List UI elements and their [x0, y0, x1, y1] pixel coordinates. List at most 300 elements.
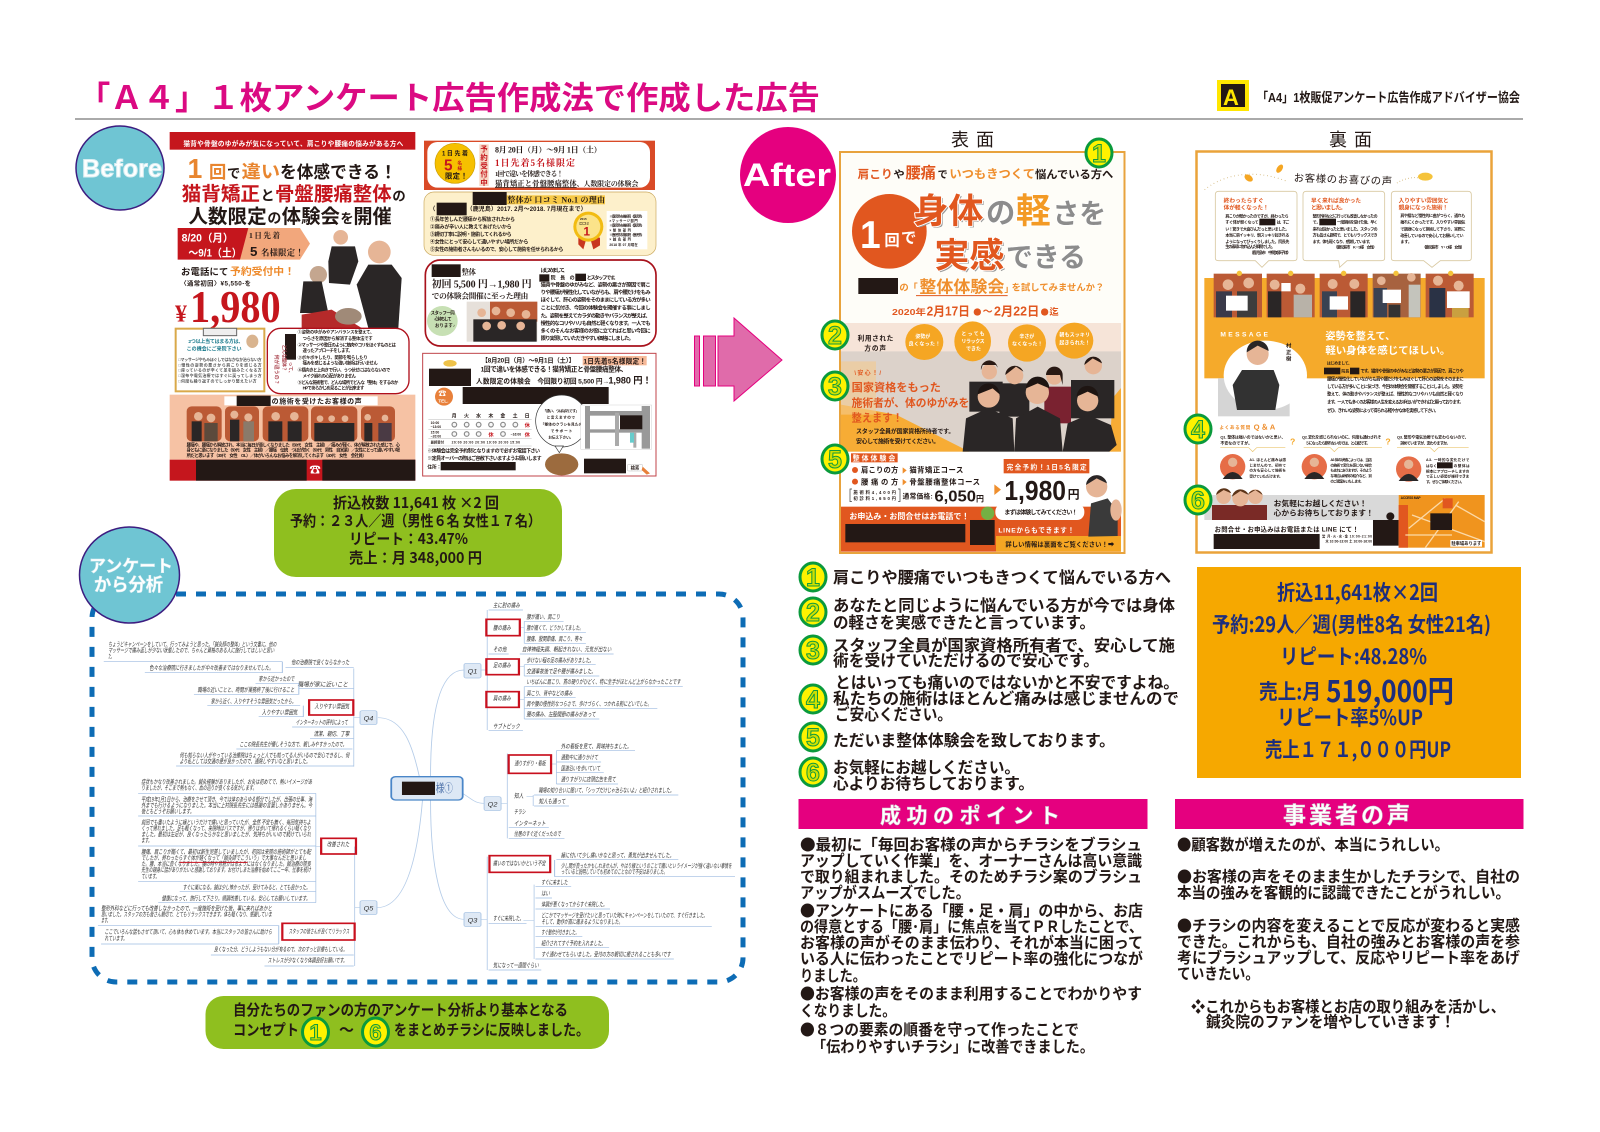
offer area: 整体体験会: [853, 453, 895, 462]
before flyer: front: で: [227, 166, 240, 181]
numbered concept list: お気軽にお越しください。: [833, 758, 1020, 777]
Q2 branch: 外の看板を見て、興味持ちました。: [561, 742, 631, 750]
why panel: 心待ちして: [434, 315, 452, 322]
concept box: をまとめチラシに反映しました。: [394, 1022, 589, 1039]
numbered concept list: 私たちの施術はほとんど痛みは感じませんので: [833, 689, 1179, 708]
Q5 branch: 後ともどうぞお願いします。: [141, 807, 194, 815]
association logo: [1217, 80, 1520, 111]
Q2 branch: Q2: [488, 801, 498, 808]
Q4 branch: 職場の近いことと、時間が業務終了後に行けること: [198, 686, 295, 694]
Q1 branch: サブトピック: [493, 722, 520, 730]
Q5 branch: ここでいろんな話もさせて頂いて、心も体も休めています。本当にスタッフの皆さんに助けら: [105, 928, 272, 936]
contact details: お問合せ・お申込みはお電話または LINE にて！: [1215, 525, 1359, 534]
before flyer: front: を体感できる！: [280, 162, 397, 182]
customer voice bubbles: 起きられた！: [1059, 340, 1090, 347]
reasons box: ③ボキボキしたり、関節を鳴らしたり: [298, 354, 368, 361]
Q2 branch: 通りすがり・看板: [514, 759, 547, 767]
Q1 branch: 歩けない程の足の痛みがありました。: [527, 657, 593, 664]
badge: survey analysis: アンケート: [89, 557, 173, 576]
Q and A: もまれにありますが、そのよう: [1330, 468, 1372, 473]
numbered concept list: 肩こりや腰痛でいつもきつくて悩んでいる方へ: [833, 568, 1171, 587]
customer voices: 身ともに楽になりました（50代 女性 主婦）／腰痛 伝統 つぼが効く（50代 男性 自営業）／女性にとって通いやすい場: [187, 447, 401, 454]
reasons box: ⑤どんな施術者で、どんな場所でどんな「整体」をするのか: [298, 379, 399, 386]
concept box: コンセプト: [233, 1022, 299, 1039]
contact bar: [841, 504, 1121, 552]
numbered concept list: とはいっても痛いのではないかと不安ですよね。: [835, 673, 1179, 692]
headline: 腰痛: [905, 165, 936, 182]
call to action banner: お気軽にお越しください！: [1274, 498, 1367, 508]
panel: success points: ●８つの要素の順番を守って作ったことで: [800, 1018, 1079, 1040]
header box with dates: 1日先着5名様限定: [495, 157, 575, 168]
customer photos: [1214, 271, 1474, 317]
schedule table: ~13:00: [431, 425, 441, 429]
Q1 branch: 足の痛み: [493, 662, 511, 669]
reasons box: ①姿勢のゆがみやアンバランスを整えて、: [298, 329, 374, 336]
Q1 branch: 腰の痛み: [493, 624, 511, 632]
Q4 branch: 入りやすい雰囲気: [262, 708, 298, 716]
panel: survey mind map: [92, 594, 743, 982]
schedule table: 休: [525, 421, 531, 429]
access panel: 1,980 円！: [608, 375, 652, 385]
number marker 3: [822, 372, 848, 401]
headline: で: [938, 170, 948, 181]
before results box: 売上：月 348,000 円: [349, 547, 482, 568]
access panel: ☎: [438, 389, 446, 398]
access panel: 1回で違いを体感できる！猫背矯正と骨盤腰痛整体、: [481, 364, 627, 373]
after results box: 売上:月: [1259, 676, 1321, 706]
panel: owner voice: できた。これからも、自社の強みとお客様の声を参: [1177, 930, 1520, 952]
staff team photo: [963, 357, 1117, 452]
schedule table: 20:00 20:00 20:00 19:00 20:00 15:00: [452, 440, 520, 444]
access panel: 人数限定の体験会: [476, 376, 531, 385]
Q3 branch: 痛いのではないかという不安: [493, 859, 547, 867]
Q4 branch: 清潔、親切、丁寧: [314, 730, 350, 738]
numbered concept list: 6: [806, 759, 820, 787]
Q5 branch: 外までも行けるようになりました。本当に上村院長先生には感謝の言葉しかありません。今: [141, 801, 313, 809]
dates: 2月17日: [927, 305, 970, 319]
contact details: 木 10:00-13:00 土 10:00-16:00: [1325, 538, 1372, 543]
access panel: 検索: [631, 464, 640, 471]
why panel: た。姿勢を整えてカラダの動きやバランスが整えば、: [541, 311, 651, 319]
why panel: 初回 5,500 円→1,980 円: [432, 278, 532, 291]
offer area: 完全予約！1日5名限定: [1007, 463, 1087, 472]
main copy: 身体: [913, 193, 984, 231]
Q5 branch: 前回でも書いたように縁というだけで痛いと思っていたが、全然 不安も無く、毎回気持ちよ: [141, 818, 311, 826]
Q1 branch: 肩こり、背中などの痛み: [527, 689, 573, 697]
Q5 branch: スタッフの皆さんが良くてリラックス: [289, 927, 350, 935]
panel: success points: で取り組まれました。そのためチラシ案のブラシュ: [800, 865, 1142, 887]
panel: success points: お客様の声がそのまま伝わり、それが本当に困って: [800, 931, 1143, 953]
panel: success points: アップしていく作業」を、オーナーさんは高い意識: [800, 849, 1142, 871]
before flyer: front: 1: [188, 153, 202, 184]
Q2 branch: 国道沿いを歩いていて: [561, 765, 600, 772]
schedule table: [428, 412, 532, 446]
Q2 branch: [484, 742, 678, 838]
Q and A: [1219, 423, 1470, 484]
offer area: [841, 452, 1121, 507]
reasons panel: word of mouth No.1: 1: [583, 224, 590, 238]
nationally qualified copy: スタッフ全員が国家資格所持者です。: [856, 427, 954, 435]
photo background: [841, 323, 1121, 452]
testimonial bubbles: 体が軽くなった！: [1224, 204, 1269, 212]
numbered concept list: 2: [806, 599, 820, 627]
before flyer: front: 猫背や骨盤のゆがみが気になっていて、肩こりや腰痛の悩みがある方へ: [183, 139, 404, 148]
Q and A: A1. ほとんど痛みは感: [1249, 457, 1286, 462]
before flyer: front: 開催: [353, 206, 392, 228]
customer voice bubbles: 利用された: [858, 334, 894, 343]
Q5 branch: た。腰、本当に良くなりました。腰の時や背筋がはるようにはなくなりました。鍼治療の院長: [141, 860, 311, 868]
contact bar: まずは体験してみてください！: [1004, 508, 1078, 516]
reasons panel: word of mouth No.1: ※鹿児島市施術院（鹿児島）: [609, 213, 644, 218]
schedule table: 休: [525, 430, 531, 438]
nationally qualified copy: 国家資格をもった: [852, 380, 941, 394]
message text: 整えて、体の動きやバランスが整えば、慢性的なコリやハリも自然と軽くなり: [1327, 391, 1464, 398]
main copy: 実感: [934, 237, 1004, 275]
nationally qualified copy: [852, 369, 969, 445]
Q5 branch: 改善された: [327, 841, 350, 848]
header box with dates: 名: [457, 159, 462, 166]
Q3 branch: っていると説明していても初めてのことなので不安はありました。: [561, 868, 667, 876]
testimonial bubbles: と思いました。: [1311, 204, 1346, 212]
number marker 6: [1185, 486, 1211, 515]
headline: いつもきつくて: [949, 167, 1035, 181]
contact details: 営 月･火･水･金 10:00-21:00: [1322, 534, 1372, 539]
Q1 branch: その他: [493, 646, 507, 653]
message text: 院長: [1341, 368, 1349, 374]
Q4 branch: インターネットの評判によって: [296, 719, 348, 726]
before flyer: front: 〈通常初回〉¥5,550-を: [180, 279, 251, 288]
label: front side: 表面: [951, 130, 994, 150]
panel: owner voice: ●チラシの内容を変えることで反応が変わると実感: [1177, 914, 1520, 936]
Q3 branch: 体調が悪くなってからすぐ来院した。: [541, 901, 607, 908]
Q3 branch: そして、動作が直に痛まるようになりました。: [541, 918, 623, 926]
access panel: TEL.: [438, 399, 448, 404]
header box with dates: [424, 141, 655, 190]
Q2 branch: 住居のすぐ近くだったので: [514, 830, 561, 838]
mind map: [98, 601, 735, 970]
Q2 branch: 通りすがりに店頭広告を見て: [561, 776, 616, 783]
Q5 branch: [98, 778, 377, 966]
panel: owner voice: ていきたい。: [1177, 962, 1259, 984]
customer voice bubbles: [858, 321, 1093, 362]
customer voice bubbles: 姿勢が: [915, 333, 930, 340]
numbered concept list: 3: [806, 637, 820, 665]
customer voice bubbles: なくなった！: [1012, 340, 1043, 347]
before flyer: front: 予約受付中！: [230, 265, 295, 278]
after results box: リピート:48.28%: [1280, 641, 1427, 671]
before flyer: front: ～9/1（土）: [188, 246, 242, 259]
central topic: 様①: [436, 782, 453, 795]
Q1 branch: [464, 601, 683, 731]
before flyer: front: ☎: [309, 465, 321, 477]
speech bubble: [536, 395, 588, 475]
Q and A: A2. 体の状態によっては、当店: [1330, 457, 1372, 462]
Q4 branch: た。: [108, 653, 114, 660]
Q and A: のご提案をいたします。: [1330, 478, 1364, 483]
reasons panel: word of mouth No.1: ③親切丁寧に説明・施術してくれるから: [430, 231, 512, 238]
why panel: とスタッフです。: [587, 274, 618, 281]
testimonial bubbles: 早く来れば良かった: [1311, 196, 1361, 204]
Q and A: で正しい姿勢が維持できま: [1426, 474, 1470, 479]
Q4 branch: Q4: [364, 715, 373, 722]
access map: 駐車場あります: [1451, 540, 1482, 547]
concept box: 自分たちのファンの方のアンケート分析より基本となる: [233, 1001, 568, 1019]
why panel: 慢性的なコリやハリも自然と軽くなります。一人でも: [541, 319, 651, 327]
numbered concept list: 1: [806, 564, 820, 592]
director portrait: 樹: [1286, 354, 1292, 362]
testimonial bubbles: で親身になって施術して下さり、実際に: [1400, 225, 1465, 231]
testimonial bubbles: 肩こりが酷かったのですが、終わったら: [1225, 212, 1289, 218]
arrow: [694, 318, 782, 401]
after flyer: front: [840, 152, 1124, 553]
testimonial bubbles: 入りやすい雰囲気と: [1399, 196, 1449, 204]
numbered concept list: [800, 563, 1179, 793]
reasons box: HPであらかじめ見ることが出来ます: [303, 385, 365, 392]
checklist clipboard: □マッサージやもみほぐしではなかなか治らない方: [178, 356, 262, 362]
main copy: 実感: [936, 239, 1006, 277]
why panel: ほぐして、肝心の姿勢をそのままにしている方が多い: [541, 295, 651, 303]
Q3 branch: 紹介されてすぐ予約を入れました。: [541, 939, 606, 947]
reasons box: 違ったアプローチをします。: [303, 347, 353, 354]
offer area: 6,050: [934, 489, 976, 506]
Q2 branch: 知人も通って: [539, 797, 566, 805]
testimonial bubbles: [1215, 191, 1471, 267]
schedule table: 休: [488, 430, 494, 438]
speech bubble: お伝え下さい。: [548, 435, 573, 440]
reasons box: [267, 328, 409, 394]
headline: 肩こり: [858, 168, 893, 181]
Q1 branch: 腰が痛い、肩こり: [527, 613, 560, 621]
before flyer: front: 骨盤腰痛整体: [275, 183, 392, 206]
why panel: [425, 260, 656, 346]
dates: 迄: [1049, 306, 1059, 317]
message text: している方が多いことに気づき、今回の体験会を開催することにしました。姿勢を: [1327, 383, 1464, 390]
reasons panel: word of mouth No.1: ×整体部門: [609, 227, 632, 232]
message text: [1324, 359, 1464, 414]
access panel: 【8月20日（月）～9月1日（土）】: [482, 356, 575, 365]
Q5 branch: Q5: [364, 905, 374, 912]
message copy: MESSAGE: [1220, 331, 1269, 338]
Q and A: Q2. 変化を感じられないのに、何度も通わされそ: [1302, 434, 1381, 440]
before flyer: front: [170, 132, 415, 481]
concept box: ～: [339, 1022, 354, 1039]
speech bubble: 「整体のクラシを見たの: [541, 421, 583, 426]
reasons panel: word of mouth No.1: ⑤女性の施術者さんもいるので、安心して施術を任せられるから: [430, 246, 563, 253]
schedule table: 日: [525, 413, 530, 419]
access panel: ※定員オーバーの際はご容赦下さいますようお願いします: [427, 455, 542, 462]
Q1 branch: 腰の痛み、左股関節の痛みがあって: [527, 711, 596, 718]
Q5 branch: れています。: [105, 934, 127, 942]
customer voices: 腰痛や、腰痛から解放され、本当に毎日が楽しくなりました（50代 女性 主婦）／痛みが軽く、体が解放された感じで、心: [187, 441, 401, 448]
why panel: おります♪: [435, 322, 455, 329]
Q4 branch: 家から近かったので: [259, 675, 295, 683]
headline: [858, 165, 1113, 182]
reasons panel: word of mouth No.1: ×鍼灸部門: [609, 237, 632, 242]
subcopy: を試してみませんか？: [1012, 282, 1104, 292]
text: 少し間が良ったかもしれませんが、やはり縁というのことで痛いというイメージが強く違いない事情を: [561, 862, 732, 870]
message text: 腰痛が慢性化していながらも肩や腰だけをもみほぐして肝心の姿勢をそのままに: [1327, 375, 1464, 382]
header box with dates: 受: [480, 161, 488, 170]
reasons panel: word of mouth No.1: 2015: [580, 217, 587, 221]
offer area: 施術料4,400円: [853, 489, 897, 496]
nationally qualified copy: \安心！/: [854, 369, 881, 377]
Q5 branch: 良くなった分、どうしようもない分が有るので、次のすっと診療もしている。: [214, 946, 347, 953]
Q4 branch: 他の治療院で良くならなかった: [291, 659, 350, 666]
concept box: [206, 996, 609, 1049]
Q and A: A3. 一時的な変化だけで: [1426, 457, 1470, 462]
customer voice bubbles: 朝もスッキリ: [1059, 331, 1090, 338]
Q1 branch: 交通事故後で足や腰が痛みました。: [527, 668, 596, 675]
testimonial bubbles: 来れば良かったと思いました。スタッフの: [1313, 225, 1378, 231]
Q5 branch: りましたが、そこまで熱もなく、血の巡りが良くなる気がします。: [141, 784, 256, 792]
schedule table: 10:00: [431, 421, 439, 425]
main copy: の: [986, 197, 1015, 230]
Q and A: す。ぜひご体験ください。: [1426, 479, 1464, 484]
message text: ます。一人でも多くのお客様の人生を変えるお手伝いができればと願っております。: [1327, 399, 1464, 406]
Q5 branch: ストレスが少なくなり体調良好お願いです。: [268, 957, 347, 964]
message text: です。猫背や骨盤のゆがみなど姿勢の悪さが原因で、肩こりや: [1360, 368, 1464, 375]
Q3 branch: すぐ動作が付きました。: [541, 928, 579, 936]
testimonial bubbles: は、すご: [1277, 219, 1289, 225]
reasons box: どんな整体？: [280, 345, 287, 371]
Q5 branch: でしたが、終わったらすぐ体が軽くなって「鍼灸師でこういう」で大事なんだと思いまし: [141, 854, 307, 862]
testimonial bubbles: 方も皆さん親切で、とてもリラックスでき: [1313, 232, 1378, 238]
number marker 1: [1086, 139, 1112, 168]
Q3 branch: Q3: [468, 916, 478, 924]
before flyer: front: を: [340, 211, 354, 226]
testimonial bubbles: 本当に肩イッキリ、朝スッキリ起きれる: [1225, 232, 1289, 238]
panel: owner voice: ❖これからもお客様とお店の取り組みを活かし、: [1191, 995, 1505, 1017]
offer area: 猫背矯正コース: [909, 466, 963, 475]
contact details: [1214, 512, 1399, 549]
checklist clipboard: □慢性の姿勢の悪さから肩こりを感じる方: [178, 361, 262, 367]
schedule table: 月: [452, 413, 457, 419]
reasons panel: word of mouth No.1: 2018 年 07 月現在: [609, 242, 638, 247]
speech bubble: でサポート: [551, 428, 573, 433]
Q3 branch: すぐ通わせてもらいました。受付の方の親切に癒されることも多いです: [541, 951, 672, 958]
Q3 branch: 縁に付いて少し痛いかなと思って、勇気が出ませんでした。: [561, 851, 674, 859]
number marker 5: [822, 445, 848, 474]
testimonial bubbles: 痛れにくかったです。入りやすい雰囲気: [1400, 219, 1465, 225]
reasons box: メイク崩れの心配がありません: [303, 372, 357, 379]
Q1 branch: 肩や腰の慢性的なつらさで、歩けづらく、つかれる割にどいでした。: [527, 700, 652, 708]
Q4 branch: 何も知らない人がやっている治療院はちょっと人でも知ってる人がいるので安心できるし、何: [180, 751, 350, 759]
Q1 branch: 腰痛、股関節痛、肩こり、等々: [527, 635, 583, 643]
before flyer: front: 回: [209, 162, 226, 182]
contact bar: LINEからもできます！: [998, 527, 1074, 535]
numbered concept list: スタッフ全員が国家資格所有者で、安心して施: [833, 636, 1175, 655]
Q1 branch: Q1: [468, 667, 477, 675]
customer voices: の施術を受けたお客様の声: [272, 396, 362, 405]
Q5 branch: すぐに楽になる。鍼は少し怖かったが、受けてみると、とても良かった。: [183, 883, 310, 891]
testimonial bubbles: 整形外科などに行っても改善しなかったの: [1313, 212, 1378, 218]
Q5 branch: 症状もかなり改善されました。鍼灸経験がありましたが、お灸は初めてで、熱いイメージがあ: [141, 778, 313, 786]
subcopy: 整体体験会: [919, 277, 1005, 296]
schedule table: 金: [500, 412, 505, 419]
testimonial bubbles: 肩や腰など慢性的に曲がつらく、通れも: [1400, 212, 1465, 218]
Q2 branch: インターネット: [514, 819, 546, 827]
contact bar: お申込み・お問合せはお電話で！: [849, 511, 969, 521]
before flyer: front: 違い: [242, 162, 280, 182]
testimonial bubbles: ようになってびっくりしました。院長先: [1225, 238, 1289, 244]
before flyer: front: 1日先着: [249, 230, 280, 240]
header box with dates: 8月 20日（月）～9月 1日（土）: [495, 145, 602, 155]
reasons box: つらさを原因から解消する整体法です: [303, 335, 373, 342]
Q4 branch: より私としては交通の便が良かったので、通院しやすいなと思いました。: [180, 757, 310, 765]
director portrait: 村: [1286, 342, 1292, 350]
Q4 branch: ちょうどキャンペーンをしていて、行ってみようと思った。「鍼灸師の整体」という文書に、他の: [108, 641, 277, 648]
customer voice bubbles: できた: [966, 345, 981, 352]
reasons box: 何が違うの？: [273, 355, 280, 385]
number marker 5: 5: [828, 446, 842, 474]
reasons panel: word of mouth No.1: ①長年苦しんだ腰痛から解放されたから: [430, 216, 515, 223]
association logo: 「A4」1枚販促アンケート広告作成アドバイザー協会: [1257, 90, 1520, 105]
Q4 branch: ここの院長先生が優しそうな方で、親しみやすかったので。: [239, 741, 347, 748]
main copy: 軽: [1016, 193, 1051, 231]
offer area: 骨盤腰痛整体コース: [909, 477, 980, 486]
central topic: [391, 777, 463, 800]
Q3 branch: どこかでマッサージを受けたいと思っていた時にキャンペーンをしていたので、すぐ行きました。: [541, 911, 707, 919]
headline: や: [893, 169, 905, 181]
offer area: 1,980: [1004, 475, 1066, 506]
before flyer: front: お電話にて: [181, 266, 228, 277]
Q and A: よくある質問: [1219, 424, 1251, 431]
dates: [892, 305, 1059, 319]
number marker 2: 2: [828, 322, 842, 350]
why panel: ことに気付き、今回の体験会を開催する事にしまし: [541, 303, 651, 311]
Q and A: じませんので、初めて: [1249, 462, 1286, 467]
Q1 branch: 自律神経失調、朝起きれない、元気が出ない: [522, 646, 612, 653]
after results box: 519,000円: [1326, 667, 1454, 711]
man with thumbs up: [1086, 475, 1122, 537]
Q and A: Q＆A: [1254, 423, 1276, 432]
checklist clipboard: □座っているのが辛くて足を組みたくなる方: [178, 367, 262, 373]
header box with dates: 様: [457, 165, 462, 171]
after flyer: back: [1196, 152, 1492, 552]
before flyer: front: と: [261, 188, 275, 204]
heading: customer voices: [1205, 163, 1433, 190]
concept box: 6: [369, 1020, 382, 1045]
Q2 branch: 知人: [514, 792, 524, 800]
number marker 6: 6: [1191, 487, 1205, 515]
why panel: 院長の: [551, 274, 575, 281]
photo: staff treating patient: [300, 230, 402, 328]
offer area: 肩こりの方: [861, 466, 898, 475]
customer voice bubbles: 辛さが: [1019, 333, 1034, 340]
Q and A: 根本にアプローチしますの: [1426, 468, 1470, 473]
nationally qualified copy: 施術者が、体のゆがみを: [852, 396, 969, 410]
reasons panel: word of mouth No.1: ×マッサージ部門: [609, 218, 638, 223]
one-time circle: 1: [860, 213, 881, 257]
speech bubble: と言えますので: [547, 415, 575, 420]
before flyer: back: [423, 141, 656, 476]
why panel: 整体: [462, 267, 477, 276]
number marker 2: [822, 321, 848, 350]
Q and A: 不安なのですが。: [1220, 439, 1252, 445]
before flyer: front: ¥: [175, 301, 187, 327]
mind map: いちばんに肩こり、首の硬りがひどく、特に生手がほとんど上がらなかったことです: [527, 678, 681, 686]
panel: success points: りました。: [800, 964, 866, 986]
panel: success points: いる人に伝わったことでリピート率の強化につなが: [800, 947, 1143, 969]
why panel: での体験会開催に至った理由: [432, 291, 529, 301]
Q5 branch: 健康になって、旅行して下さり。順調改善している。安心してお願いしています。: [162, 895, 310, 902]
association logo: A: [1223, 85, 1239, 110]
testimonial bubbles: （鹿児島市 Y・O様 女性）: [1422, 244, 1465, 250]
testimonial bubbles: い！驚きで大喜びんだっと思いました。: [1225, 225, 1289, 231]
offer area: 通常価格:: [903, 491, 933, 500]
panel: owner voice: 事業者の声: [1283, 796, 1410, 830]
badge: survey analysis: [80, 527, 180, 623]
